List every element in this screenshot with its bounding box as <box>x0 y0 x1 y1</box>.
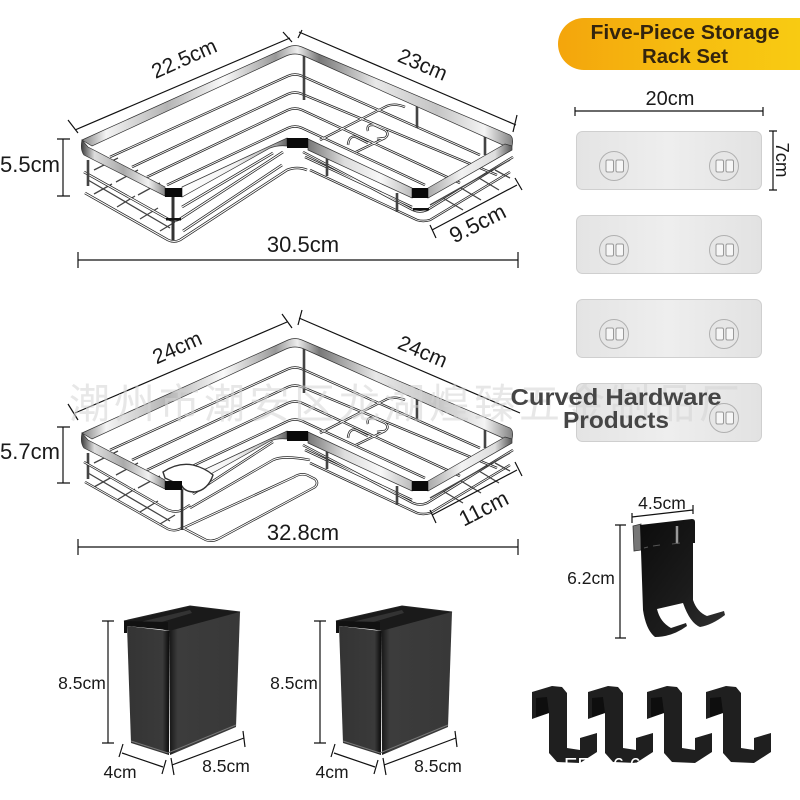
dimensions: large rack <box>0 30 522 268</box>
small hooks row <box>532 686 771 763</box>
rack two wire frame <box>81 338 513 541</box>
panel: extra large corner rack <box>0 310 522 555</box>
storage box two <box>336 606 452 755</box>
dimension: plate width: 20cm <box>646 88 694 110</box>
badge: five-piece set <box>558 18 800 70</box>
dimensions: box one <box>58 621 250 782</box>
large curved hook <box>633 519 725 637</box>
dimensions: box one: 8.5cm <box>58 673 106 693</box>
small hook one <box>532 686 597 763</box>
dimensions: extra large rack: 24cm <box>394 331 451 373</box>
dimensions: large rack: 9.5cm <box>445 199 510 248</box>
adhesive plate two <box>576 216 762 274</box>
adhesive plate four <box>576 384 762 442</box>
small hook three <box>647 686 712 763</box>
dimensions: box two: 8.5cm <box>414 756 462 776</box>
panel: large corner rack <box>0 30 522 268</box>
small hook four <box>706 686 771 763</box>
dimensions: large rack: 23cm <box>394 44 451 86</box>
small hook two <box>588 686 653 763</box>
dimensions: large hook: 4.5cm <box>638 493 686 513</box>
dimensions: box one: 4cm <box>103 762 137 782</box>
heading: curved hardware products: Curved Hardware <box>510 384 722 410</box>
dimension: plate height: 7cm <box>772 143 793 177</box>
dimensions: large hook <box>567 493 693 638</box>
heading: curved hardware products: Products <box>563 407 669 433</box>
dimension: plate width <box>575 88 763 116</box>
adhesive plate one <box>576 132 762 190</box>
dimensions: extra large rack <box>0 310 522 555</box>
badge: five-piece set: Rack Set <box>642 46 728 68</box>
dimensions: large rack: 22.5cm <box>148 35 220 84</box>
dimensions: box two: 8.5cm <box>270 673 318 693</box>
dimensions: large rack: 30.5cm <box>267 232 339 257</box>
dimensions: large rack: 5.5cm <box>0 152 60 177</box>
heading: curved hardware products <box>510 384 722 433</box>
rack one wire frame <box>81 46 513 242</box>
storage box one <box>124 606 240 755</box>
watermark: 潮州市潮安区龙湖煌臻五金制品厂 <box>69 381 744 427</box>
dimensions: box one: 8.5cm <box>202 756 250 776</box>
badge: five-piece set: Five-Piece Storage <box>590 22 780 44</box>
dimension: plate height <box>769 131 793 190</box>
dimensions: extra large rack: 11cm <box>455 485 513 531</box>
dimensions: box two: 4cm <box>315 762 349 782</box>
bottom watermark: EE 7 6 68 <box>564 755 652 777</box>
dimensions: extra large rack: 24cm <box>149 327 205 369</box>
dimensions: large hook: 6.2cm <box>567 568 615 588</box>
dimensions: box two <box>270 621 462 782</box>
adhesive plate three <box>576 300 762 358</box>
dimensions: extra large rack: 5.7cm <box>0 439 60 464</box>
dimensions: extra large rack: 32.8cm <box>267 520 339 545</box>
